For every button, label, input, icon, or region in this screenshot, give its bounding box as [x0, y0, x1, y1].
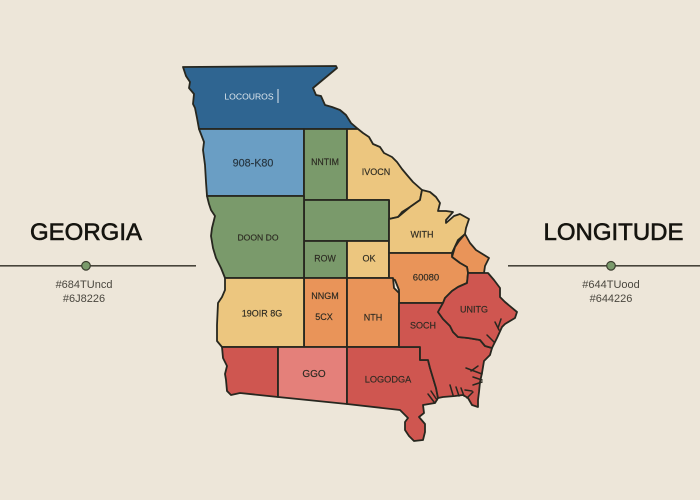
left panel: Georgia — [0, 219, 196, 305]
left caption: #6J8226 — [63, 293, 105, 305]
region: yellow southwest — [217, 278, 304, 347]
label: orange south center: NTH — [364, 312, 382, 322]
left caption: #684TUncd — [56, 279, 112, 291]
region: orange middle — [304, 278, 347, 347]
left axis line — [0, 265, 196, 267]
label: yellow small: OK — [362, 254, 376, 264]
right caption: #644TUood — [582, 279, 640, 291]
right axis marker — [607, 262, 615, 270]
label: light blue: 908-K80 — [233, 158, 273, 170]
label: orange lower: 5CX — [315, 312, 333, 322]
coastal marsh strokes — [428, 319, 501, 402]
region: red east — [438, 273, 517, 348]
region: yellow northeast — [347, 129, 422, 219]
region: green west — [207, 196, 304, 278]
label: red east: UNITG — [460, 304, 488, 314]
right caption: #644226 — [590, 293, 632, 305]
region: north blue — [183, 66, 358, 129]
region: red southeast — [399, 303, 492, 407]
left caption — [56, 279, 112, 305]
label: red southeast: SOCH — [410, 320, 436, 330]
heading: Georgia: GEORGIA — [30, 219, 142, 246]
region: green small — [304, 241, 347, 278]
map of Georgia regions — [183, 66, 517, 441]
label: yellow northeast: IVOCN — [362, 167, 390, 177]
region: orange south center — [347, 278, 399, 347]
region: red south center — [347, 347, 438, 441]
label: orange upper: NNGM — [311, 291, 339, 301]
label: green column: NNTIM — [311, 157, 339, 167]
region: yellow small — [347, 241, 389, 278]
heading: Longitude: LONGITUDE — [543, 219, 684, 246]
label: yellow east: WITH — [410, 230, 434, 240]
label: green west: DOON DO — [237, 232, 279, 242]
region: orange tip — [452, 234, 489, 273]
region: green column — [304, 129, 347, 200]
label: green small: ROW — [314, 254, 336, 264]
label: red south center: LOGODGA — [365, 374, 412, 384]
region: light blue — [199, 129, 304, 196]
region: pink south — [278, 347, 347, 404]
label: yellow southwest: 19OIR 8G — [242, 308, 282, 318]
label: orange center east: 60080 — [413, 272, 439, 284]
right axis line — [508, 265, 700, 267]
left axis marker — [82, 262, 90, 270]
map labels — [224, 89, 488, 384]
right caption — [582, 279, 640, 305]
right panel: Longitude — [508, 219, 700, 305]
label: blue divider bar — [278, 89, 279, 103]
label: pink south: GGO — [302, 369, 326, 380]
region: red southwest — [222, 347, 278, 397]
region: green wide — [304, 200, 389, 241]
label: north blue: LOCOUROS — [224, 92, 274, 102]
region: orange center east — [389, 253, 468, 303]
region: yellow east — [389, 190, 469, 253]
